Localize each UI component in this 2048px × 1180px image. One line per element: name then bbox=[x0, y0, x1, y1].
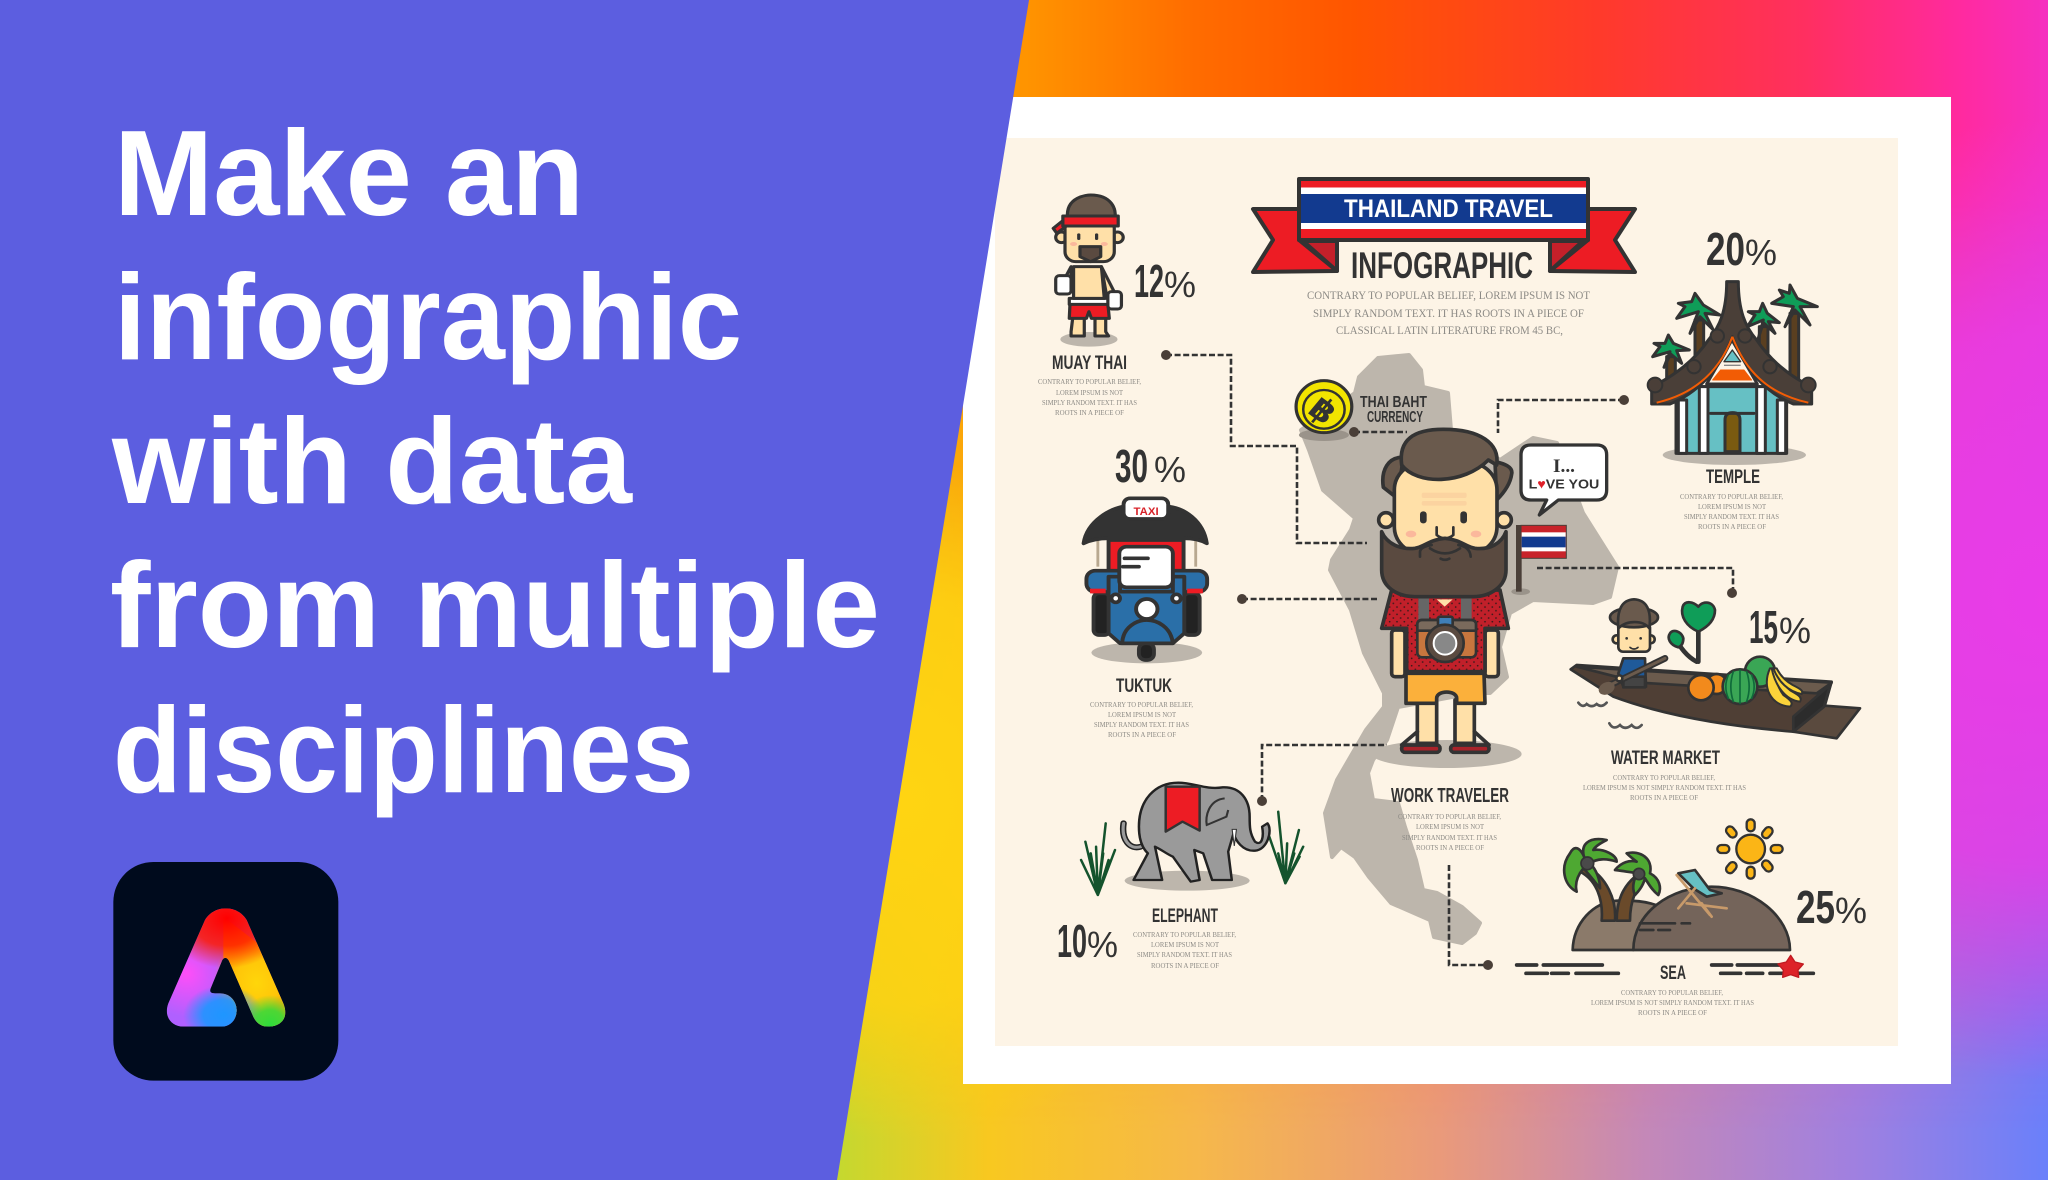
intro text: SIMPLY RANDOM TEXT. IT HAS ROOTS IN A PIECE OF bbox=[1313, 306, 1584, 320]
label: sea: LOREM IPSUM IS NOT SIMPLY RANDOM TEXT. IT HAS bbox=[1591, 998, 1754, 1007]
label: temple bbox=[1680, 466, 1783, 531]
label: muay thai: LOREM IPSUM IS NOT bbox=[1056, 388, 1123, 397]
label: work traveler bbox=[1391, 785, 1509, 852]
stat: 30%: % bbox=[1154, 449, 1186, 490]
stat: 12%: 12 bbox=[1134, 255, 1164, 307]
label: muay thai bbox=[1038, 352, 1141, 417]
label: muay thai: MUAY THAI bbox=[1052, 352, 1127, 374]
icon: tuktuk: TAXI bbox=[1133, 506, 1159, 518]
label: elephant: ELEPHANT bbox=[1152, 905, 1218, 927]
intro text: CONTRARY TO POPULAR BELIEF, LOREM IPSUM IS NOT bbox=[1307, 288, 1591, 302]
label: elephant: ROOTS IN A PIECE OF bbox=[1151, 961, 1219, 970]
gradient background bbox=[800, 0, 2048, 1180]
stat: 15%: % bbox=[1779, 610, 1811, 651]
label: work traveler: LOREM IPSUM IS NOT bbox=[1416, 822, 1484, 831]
label: work traveler: SIMPLY RANDOM TEXT. IT HAS bbox=[1402, 833, 1497, 842]
label: water market: CONTRARY TO POPULAR BELIEF, bbox=[1613, 773, 1715, 782]
label: tuktuk: ROOTS IN A PIECE OF bbox=[1108, 730, 1176, 739]
label: elephant: CONTRARY TO POPULAR BELIEF, bbox=[1133, 930, 1236, 939]
stat: 25%: 25 bbox=[1796, 881, 1835, 933]
heading: disciplines bbox=[113, 682, 694, 818]
label: muay thai: ROOTS IN A PIECE OF bbox=[1055, 408, 1124, 417]
label: work traveler: WORK TRAVELER bbox=[1391, 785, 1509, 807]
icon: temple with palms bbox=[1648, 282, 1817, 465]
label: tuktuk: LOREM IPSUM IS NOT bbox=[1108, 710, 1176, 719]
connector lines bbox=[1161, 350, 1737, 970]
icon: elephant with grass bbox=[1081, 783, 1303, 895]
stat: 25%: % bbox=[1835, 890, 1867, 931]
label: work traveler: ROOTS IN A PIECE OF bbox=[1416, 843, 1484, 852]
icon: muay thai fighter bbox=[1053, 195, 1123, 347]
label: temple: CONTRARY TO POPULAR BELIEF, bbox=[1680, 492, 1783, 501]
stat: 20%: % bbox=[1745, 232, 1777, 273]
label: thai baht currency: CURRENCY bbox=[1367, 409, 1423, 426]
stat: 20%: 20 bbox=[1706, 223, 1745, 275]
stat: 10%: 10 bbox=[1057, 915, 1087, 967]
panel: cream infographic sheet bbox=[995, 138, 1898, 1046]
label: water market: ROOTS IN A PIECE OF bbox=[1630, 793, 1698, 802]
heading: infographic bbox=[114, 249, 742, 385]
icon: water market boat bbox=[1571, 599, 1860, 738]
label: elephant: LOREM IPSUM IS NOT bbox=[1151, 940, 1219, 949]
label: temple: SIMPLY RANDOM TEXT. IT HAS bbox=[1684, 512, 1779, 521]
title ribbon: THAILAND TRAVEL bbox=[1344, 195, 1553, 223]
heading: Make an bbox=[114, 105, 584, 241]
icon: tuktuk bbox=[1084, 498, 1207, 663]
icon: work traveler character bbox=[1372, 429, 1522, 768]
intro text: CLASSICAL LATIN LITERATURE FROM 45 BC, bbox=[1336, 323, 1563, 337]
title ribbon bbox=[1253, 179, 1635, 272]
label: water market: WATER MARKET bbox=[1611, 747, 1720, 769]
icon: thai baht coin bbox=[1296, 381, 1352, 441]
label: muay thai: SIMPLY RANDOM TEXT. IT HAS bbox=[1042, 398, 1137, 407]
stat: 10%: % bbox=[1087, 924, 1118, 965]
icon: thai flag bbox=[1511, 525, 1566, 595]
stat: 12%: % bbox=[1164, 264, 1196, 305]
label: thai baht currency: THAI BAHT bbox=[1360, 394, 1427, 411]
label: elephant: SIMPLY RANDOM TEXT. IT HAS bbox=[1137, 950, 1232, 959]
label: temple: LOREM IPSUM IS NOT bbox=[1698, 502, 1766, 511]
stat: 30%: 30 bbox=[1115, 440, 1148, 492]
blue left panel bbox=[0, 0, 1029, 1180]
label: sea bbox=[1591, 962, 1754, 1017]
map of Thailand bbox=[1301, 355, 1617, 943]
label: water market: LOREM IPSUM IS NOT SIMPLY RANDOM TEXT. IT HAS bbox=[1583, 783, 1746, 792]
icon: thai baht coin: ฿ bbox=[1301, 389, 1345, 432]
callout: I love you speech bubble bbox=[1521, 445, 1607, 515]
icon: sea island with palms and sun bbox=[1517, 819, 1813, 977]
heading: with data bbox=[111, 393, 633, 529]
label: tuktuk: SIMPLY RANDOM TEXT. IT HAS bbox=[1094, 720, 1189, 729]
label: temple: ROOTS IN A PIECE OF bbox=[1698, 522, 1766, 531]
stat: 15%: 15 bbox=[1749, 601, 1778, 653]
label: sea: CONTRARY TO POPULAR BELIEF, bbox=[1621, 988, 1723, 997]
intro text bbox=[1307, 288, 1591, 337]
heading: from multiple bbox=[110, 537, 880, 673]
heading: infographic: INFOGRAPHIC bbox=[1351, 245, 1533, 286]
callout: I love you speech bubble: I... bbox=[1553, 456, 1575, 477]
label: sea: ROOTS IN A PIECE OF bbox=[1638, 1008, 1707, 1017]
label: muay thai: CONTRARY TO POPULAR BELIEF, bbox=[1038, 377, 1141, 386]
callout: I love you speech bubble: L♥VE YOU bbox=[1529, 476, 1599, 491]
label: elephant bbox=[1133, 905, 1236, 970]
label: tuktuk: TUKTUK bbox=[1116, 675, 1172, 697]
label: sea: SEA bbox=[1660, 962, 1686, 984]
heading bbox=[110, 105, 880, 818]
label: water market bbox=[1583, 747, 1746, 802]
label: work traveler: CONTRARY TO POPULAR BELIEF, bbox=[1398, 812, 1501, 821]
label: temple: TEMPLE bbox=[1706, 466, 1760, 488]
label: thai baht currency bbox=[1360, 394, 1427, 426]
label: tuktuk bbox=[1090, 675, 1193, 739]
label: tuktuk: CONTRARY TO POPULAR BELIEF, bbox=[1090, 700, 1193, 709]
icon: Adobe Express logo bbox=[113, 862, 338, 1081]
white card bbox=[963, 97, 1951, 1084]
